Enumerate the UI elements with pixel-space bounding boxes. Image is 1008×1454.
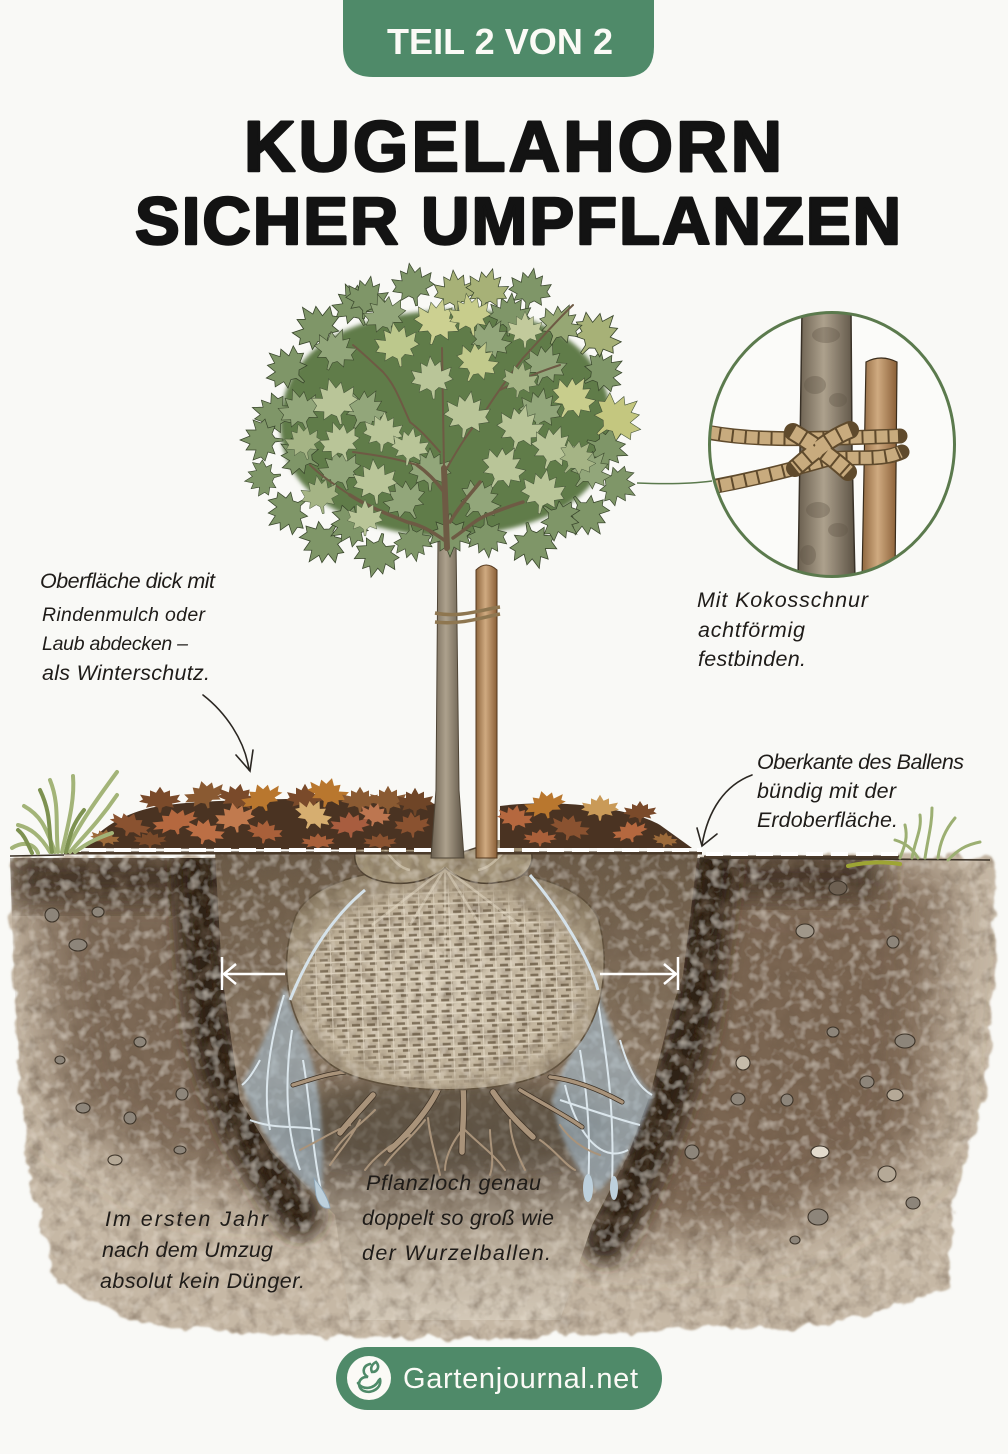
pebbles [45,881,920,1244]
note: no fertilizer [100,1207,305,1293]
note: mulch: Rindenmulch oder [42,604,206,626]
note: top of ball: bündig mit der [757,779,897,803]
dark hole walls [200,866,712,1240]
note: top of ball: Oberkante des Ballens [757,750,964,774]
branches [310,305,573,548]
note: mulch: Laub abdecken – [42,633,188,655]
note: planting hole: doppelt so groß wie [362,1206,554,1230]
note: planting hole: Pflanzloch genau [366,1171,541,1195]
inset detail circle [637,311,956,578]
shadow below ball [280,1080,610,1170]
note: coconut cord [697,588,869,671]
note: mulch: als Winterschutz. [42,661,210,685]
footer brand pill [336,1347,662,1410]
grass left [12,772,117,853]
badge: part 2 of 2: TEIL 2 VON 2 [387,21,613,62]
ground line [10,850,990,860]
tree canopy [240,260,653,583]
note: coconut cord: festbinden. [698,647,806,671]
arrows: hole width [222,957,678,990]
soil cross-section [10,850,996,1338]
arrow: to surface [697,775,752,846]
badge: part 2 of 2 [343,0,654,77]
burlap ruffle [355,836,532,883]
arrow: to mulch [203,695,253,771]
trunk tie rope [435,607,500,623]
note: planting hole: der Wurzelballen. [362,1241,551,1265]
soil shading [30,870,300,1190]
planting hole [215,852,698,1320]
water seeping out [242,985,654,1208]
trunk [431,540,464,858]
soil body [10,858,996,1338]
note: top of ball [757,750,964,832]
note: no fertilizer: Im ersten Jahr [105,1207,269,1231]
bark marks [802,327,846,565]
water streams on ball [290,875,598,1000]
note: no fertilizer: nach dem Umzug [102,1238,273,1262]
icon: logo [347,1356,391,1400]
note: no fertilizer: absolut kein Dünger. [100,1269,305,1293]
title: KUGELAHORN [244,108,782,187]
burlap root ball [280,836,610,1100]
inset stake [862,358,897,580]
note: top of ball: Erdoberfläche. [757,808,898,832]
roots [293,1072,622,1175]
note: mulch: Oberfläche dick mit [40,569,216,593]
mid leaves [273,287,620,530]
note: mulch [40,569,216,685]
stake [476,565,497,858]
canopy mass [280,310,612,538]
footer brand pill: Gartenjournal.net [403,1363,638,1395]
inset trunk [798,310,855,580]
note: planting hole [362,1171,554,1265]
title: SICHER UMPFLANZEN [135,184,901,259]
inset leader line [637,481,712,484]
grass right [848,808,980,866]
note: coconut cord: Mit Kokosschnur [697,588,869,612]
pale leaves [281,290,653,536]
title [135,108,901,259]
inset rope [706,430,902,488]
dark edge leaves [240,260,645,583]
mulch layer [85,773,692,850]
note: coconut cord: achtförmig [698,618,805,642]
